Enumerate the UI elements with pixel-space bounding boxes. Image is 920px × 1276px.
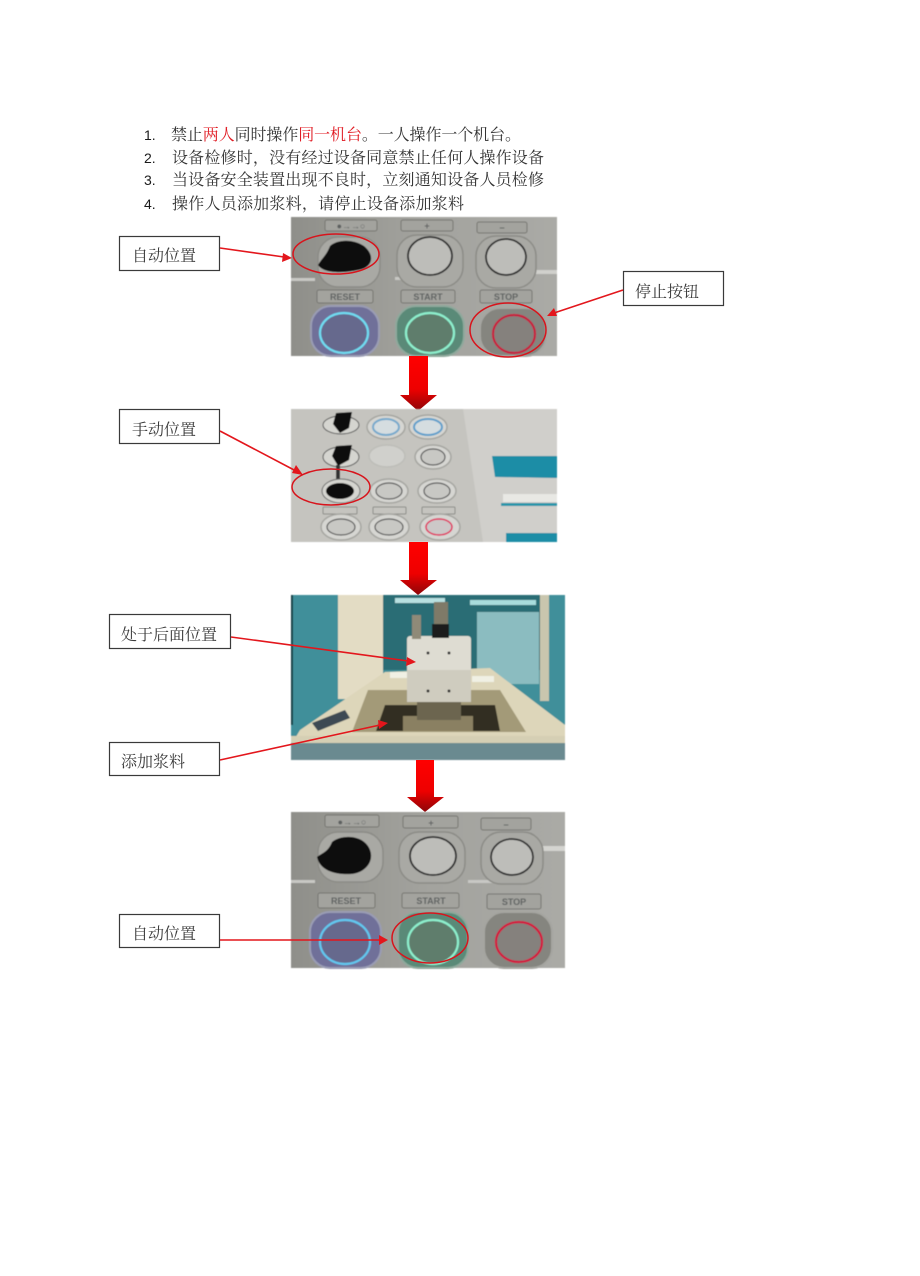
photo: control panel auto position (291, 217, 557, 356)
instruction list (144, 126, 544, 213)
callout: auto position 2: 自动位置 (132, 925, 196, 943)
photo: control panel back to auto: − (503, 820, 509, 830)
instruction list: 4. (144, 196, 156, 212)
callout: auto position 1: 自动位置 (132, 247, 196, 265)
photo: control panel back to auto: + (428, 818, 434, 828)
arrow: down 1 (400, 356, 437, 411)
callout: manual position: 手动位置 (132, 421, 196, 439)
callout: add slurry (110, 720, 388, 776)
photo: control panel auto position: STOP (494, 292, 518, 302)
instruction list: 当设备安全装置出现不良时，立刻通知设备人员检修 (172, 171, 544, 189)
callout: rear position (110, 614, 416, 666)
photo: control panel back to auto: STOP (502, 897, 526, 907)
photo: control panel auto position: RESET (330, 292, 361, 302)
callout: rear position: 处于后面位置 (121, 626, 217, 644)
photo: control panel back to auto: RESET (331, 896, 362, 906)
photo: control panel auto position: − (499, 223, 505, 233)
photo: control panel auto position: + (424, 221, 430, 231)
callout: auto position 2 (120, 913, 468, 963)
callout: manual position (120, 410, 370, 505)
instruction list: 2. (144, 150, 156, 166)
instruction list: 设备检修时，没有经过设备同意禁止任何人操作设备 (172, 149, 544, 167)
arrow: down 3 (407, 760, 444, 812)
arrow: down 2 (400, 542, 437, 595)
photo: machine with head at rear (291, 595, 565, 760)
callout: stop button (470, 272, 724, 357)
callout: add slurry: 添加浆料 (121, 753, 185, 771)
callout: auto position 1 (120, 234, 379, 274)
photo: control panel back to auto: START (416, 896, 446, 906)
instruction list: 1. (144, 127, 156, 143)
photo: control panel auto position: ●→→○ (337, 221, 365, 231)
photo: control panel manual position (291, 409, 557, 542)
instruction list: 操作人员添加浆料，请停止设备添加浆料 (172, 195, 464, 213)
photo: control panel auto position: START (413, 292, 443, 302)
photo: control panel back to auto: ●→→○ (338, 817, 366, 827)
instruction list: 3. (144, 172, 156, 188)
callout: stop button: 停止按钮 (635, 283, 699, 301)
photo: control panel back to auto (291, 812, 565, 968)
instruction list: 禁止两人同时操作同一机台。一人操作一个机台。 (171, 126, 521, 144)
